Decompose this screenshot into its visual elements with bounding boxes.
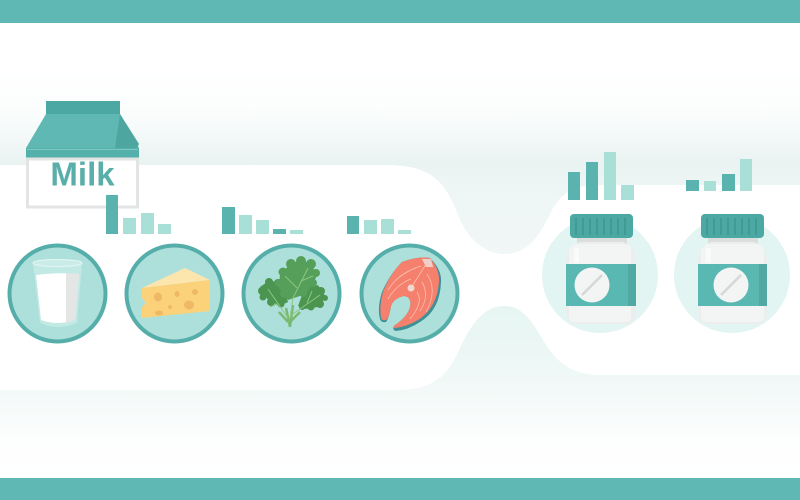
- icon: kale: [244, 246, 340, 342]
- white flowing band: [0, 165, 800, 390]
- bar chart: supplement two: [686, 159, 752, 191]
- icon: glass of milk: [10, 246, 106, 342]
- bar chart: milk group: [106, 195, 171, 234]
- carton label: Milk: [50, 156, 115, 192]
- bottom banner: [0, 478, 800, 500]
- icon: salmon steak: [362, 246, 458, 342]
- icon: supplement bottle one: [542, 214, 658, 333]
- top banner: [0, 0, 800, 23]
- icon: milk carton: [26, 101, 139, 207]
- icon: supplement bottle two: [674, 214, 790, 333]
- bar chart: kale group: [222, 207, 303, 234]
- bar chart: salmon group: [347, 216, 411, 234]
- bar chart: supplement one: [568, 152, 634, 200]
- icon: cheese: [126, 246, 222, 342]
